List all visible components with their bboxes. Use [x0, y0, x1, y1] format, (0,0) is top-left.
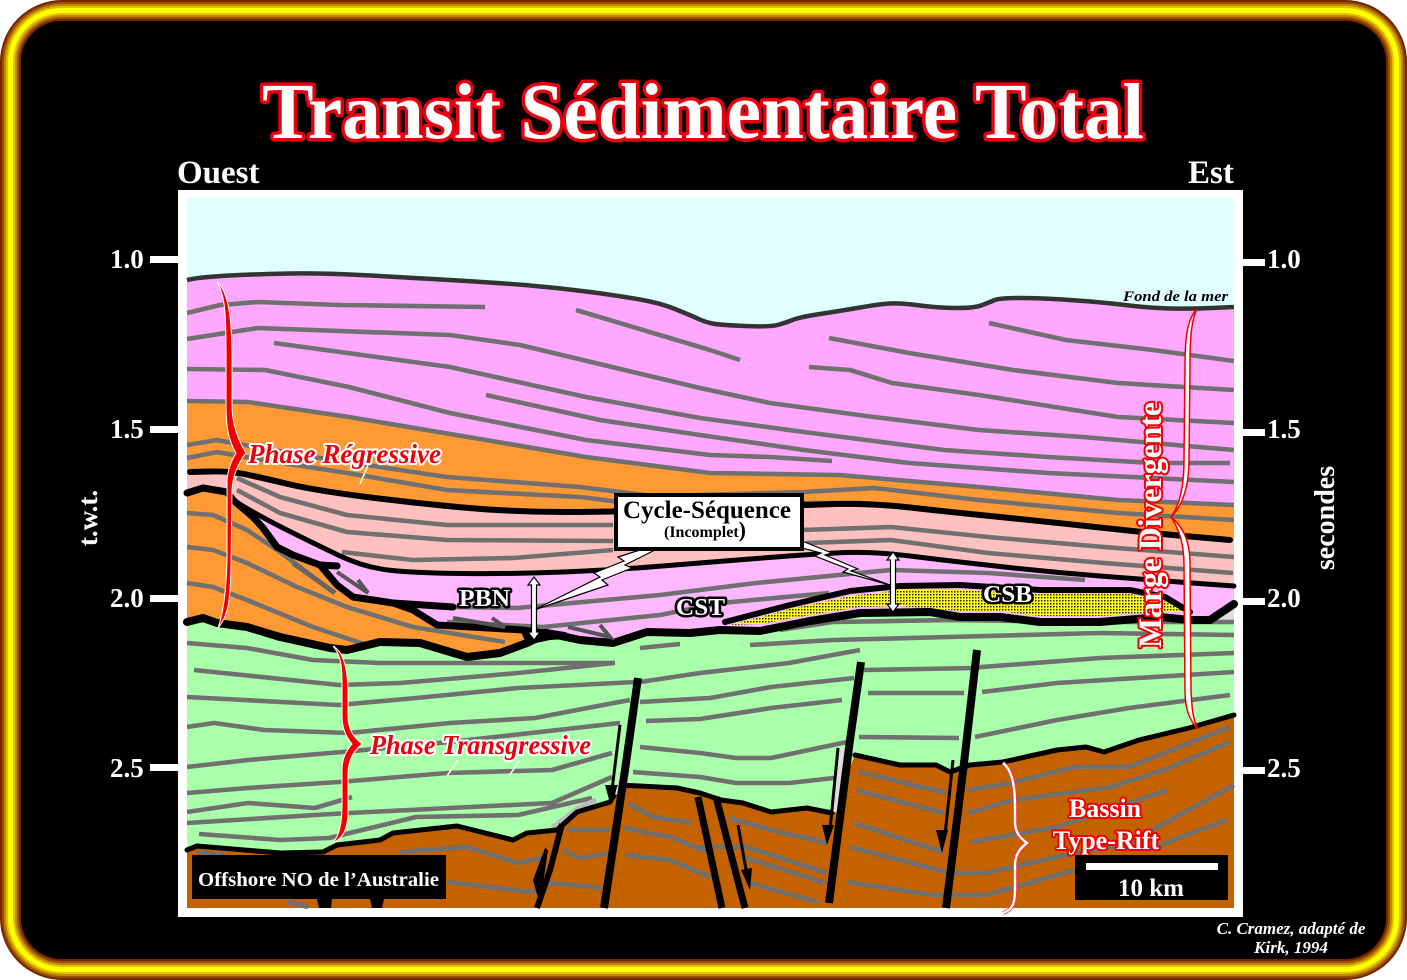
- left axis: two-way time: 2.0: [110, 583, 144, 613]
- left axis: two-way time: t.w.t.: [73, 490, 103, 546]
- layer: green transgressive unit: [187, 612, 1234, 908]
- double arrow: right sequence thickness: [887, 552, 899, 612]
- label: west: Ouest: [177, 155, 260, 191]
- right axis: seconds: [1243, 244, 1341, 783]
- grey onlap arrows: [293, 563, 610, 637]
- label: east: Est: [1188, 155, 1234, 191]
- brace: transgressive phase: [333, 646, 362, 843]
- label: Fond de la mer: Fond de la mer: [1122, 289, 1228, 305]
- right axis: seconds: 2.5: [1267, 753, 1301, 783]
- brace: rift basin: [1003, 763, 1027, 913]
- black bulge where wedge pinches out: [520, 629, 580, 645]
- label: Marge Divergente: Marge Divergente: [1133, 402, 1169, 648]
- label: PBN: PBN: [459, 586, 511, 612]
- credit: C. Cramez, adapté de: [1217, 919, 1366, 938]
- sea floor line: [187, 273, 1234, 326]
- credit: [1217, 919, 1366, 957]
- layer: light pink unit: [187, 471, 1234, 908]
- double arrow: left sequence thickness: [528, 577, 540, 640]
- label: Bassin Type-Rift: Type-Rift: [1053, 826, 1160, 855]
- light grey sliver on rift shoulder: [552, 800, 596, 828]
- strata lines: orange unit: [187, 401, 1234, 520]
- layer: upper pink unit: [187, 273, 1234, 908]
- strata lines: orange wedge: [187, 513, 505, 645]
- left axis: two-way time: 2.5: [110, 753, 144, 783]
- scale bar: [1075, 855, 1228, 902]
- location box: Offshore NO de l’Australie: [198, 869, 439, 891]
- sand layer: basin floor yellow: [730, 590, 1185, 625]
- lightning callout: right: [802, 541, 890, 585]
- left axis: two-way time: [73, 244, 178, 783]
- callout box: Cycle-Séquence: (Incomplet): [664, 517, 746, 542]
- strata lines: light pink unit: [237, 478, 1234, 573]
- sequence boundaries: thick black lines: [187, 471, 1234, 853]
- normal faults: [537, 650, 977, 908]
- brace: rift basin highlight: [1003, 763, 1027, 913]
- left axis: two-way time: 1.0: [110, 244, 144, 274]
- label: Phase Transgressive: Phase Transgressive: [369, 730, 591, 760]
- callout tails for phase labels: [360, 465, 520, 776]
- title: Transit Sédimentaire Total: [262, 69, 1144, 156]
- strata lines: brown rift basin: [197, 727, 1234, 907]
- label: Phase Régressive: Phase Régressive: [247, 439, 441, 469]
- layer: brown rift basin: [187, 715, 1234, 908]
- right axis: seconds: 1.5: [1267, 414, 1301, 444]
- callout box: Cycle-Séquence: [616, 495, 802, 549]
- right axis: seconds: 2.0: [1267, 583, 1301, 613]
- lightning callout: left: [534, 550, 655, 610]
- layer: orange wedge: [187, 487, 543, 908]
- fault motion arrows: [533, 725, 953, 905]
- callout box: Cycle-Séquence: Cycle-Séquence: [623, 497, 791, 524]
- scale bar: 10 km: [1118, 875, 1184, 902]
- strata lines: green unit: [187, 620, 1234, 840]
- layer: orange unit: [187, 401, 1234, 908]
- layer: lilac unit: [233, 500, 1234, 908]
- right axis: seconds: secondes: [1310, 466, 1341, 570]
- left axis: two-way time: 1.5: [110, 414, 144, 444]
- layer: grey wedge at right edge: [1190, 604, 1234, 624]
- label: CST: CST: [676, 595, 725, 621]
- panel: seismic cross-section: [178, 190, 1243, 917]
- label: CSB: CSB: [983, 582, 1032, 608]
- layer: sea water: [187, 198, 1234, 908]
- bottom fault stubs under location box: [317, 899, 384, 908]
- label: Bassin Type-Rift: [1053, 794, 1160, 855]
- right axis: seconds: 1.0: [1267, 244, 1301, 274]
- strata lines: lilac unit: [447, 570, 1085, 627]
- label: Bassin Type-Rift: Bassin: [1069, 794, 1142, 823]
- strata lines: pink unit: [187, 302, 1234, 482]
- light grey fault slivers: [618, 748, 843, 812]
- brace: regressive phase: [217, 282, 246, 628]
- credit: Kirk, 1994: [1253, 938, 1328, 957]
- location box: [192, 855, 446, 899]
- brace: divergent margin: [1171, 309, 1198, 729]
